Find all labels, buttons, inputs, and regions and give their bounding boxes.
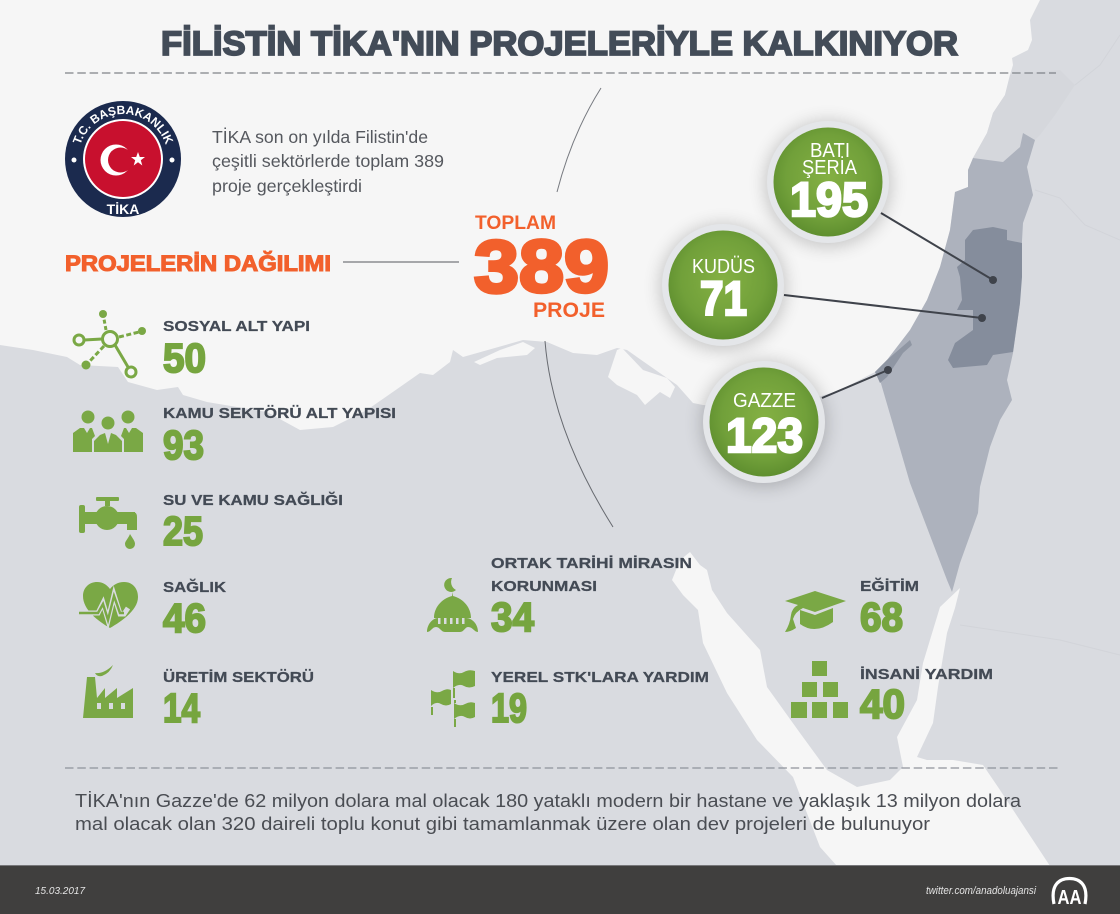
item: kamu sektörü alt yapısı: KAMU SEKTÖRÜ ALT YAPISI — [163, 405, 396, 422]
total: 389 proje: TOPLAM — [475, 213, 556, 234]
map: Lebanon area — [973, 70, 1075, 162]
icon: heart — [78, 582, 138, 628]
arc: upper — [557, 88, 601, 192]
item: sağlık: SAĞLIK — [163, 578, 226, 596]
item: su ve kamu sağlığı: SU VE KAMU SAĞLIĞI — [163, 491, 343, 509]
icon: network — [74, 310, 146, 377]
map: Israel region — [875, 133, 1035, 592]
item: sosyal alt yapı: 50 — [163, 335, 206, 381]
logo: TİKA emblem — [65, 101, 181, 217]
logo: TİKA emblem: TİKA — [107, 201, 139, 217]
item: sağlık: 46 — [163, 595, 206, 641]
item: yerel stk'lara yardım — [431, 669, 709, 731]
item: su ve kamu sağlığı — [79, 491, 343, 554]
item: eğitim: 68 — [860, 594, 903, 640]
item: ortak tarihi mirasın korunması: 34 — [491, 594, 534, 640]
item: su ve kamu sağlığı: 25 — [163, 508, 203, 554]
icon: flags — [431, 670, 475, 727]
item: insani yardım: 40 — [860, 681, 905, 727]
footer date: 15.03.2017 — [35, 886, 85, 897]
badge: Kudüs 71: KUDÜS — [692, 256, 755, 278]
footer bar — [0, 865, 1120, 914]
item: sağlık — [78, 578, 226, 641]
badge: Batı Şeria 195: 195 — [790, 174, 868, 227]
map: faint borders — [960, 35, 1120, 655]
intro text: çeşitli sektörlerde toplam 389 — [212, 151, 444, 171]
item: üretim sektörü: ÜRETİM SEKTÖRÜ — [163, 669, 314, 686]
bottom note: mal olacak olan 320 daireli toplu konut gibi tamamlanmak üzere olan dev projeleri de bulunuyor — [75, 814, 930, 834]
icon: people — [73, 410, 143, 452]
logo: Anadolu Ajansı — [1053, 878, 1086, 909]
bottom note — [75, 791, 1022, 834]
item: ortak tarihi mirasın korunması: ORTAK TARİHİ MİRASIN — [491, 555, 692, 572]
badge: Kudüs 71: 71 — [700, 273, 747, 326]
item: sosyal alt yapı: SOSYAL ALT YAPI — [163, 318, 310, 335]
arc: lower — [545, 341, 613, 527]
item: insani yardım: İNSANİ YARDIM — [860, 666, 993, 683]
item: ortak tarihi mirasın korunması: KORUNMASI — [491, 578, 597, 595]
badge: Gazze 123: GAZZE — [733, 390, 796, 412]
bottom note: TİKA'nın Gazze'de 62 milyon dolara mal olacak 180 yataklı modern bir hastane ve yaklaşık 13 milyon dolara — [75, 791, 1022, 811]
logo: Anadolu Ajansı: AA — [1058, 887, 1082, 909]
map: coastal lagoons — [474, 342, 675, 405]
total: 389 proje: 389 — [474, 225, 609, 308]
heading: projelerin dağılımı: PROJELERİN DAĞILIMI — [65, 251, 331, 276]
badge: Batı Şeria 195: BATI — [810, 140, 850, 162]
connector: Batı Şeria — [881, 213, 997, 284]
badge: Gazze 123: 123 — [726, 410, 803, 463]
badge: Kudüs 71 — [661, 224, 785, 349]
total: 389 proje — [474, 213, 609, 322]
map: Gaza — [875, 340, 912, 383]
title: FİLİSTİN TİKA'NIN PROJELERİYLE KALKINIYOR — [161, 25, 958, 63]
connector: Gazze — [822, 366, 892, 398]
item: insani yardım — [791, 661, 993, 727]
intro text: proje gerçekleştirdi — [212, 176, 362, 196]
item: eğitim: EĞİTİM — [860, 577, 919, 595]
item: yerel stk'lara yardım: 19 — [491, 685, 527, 731]
item: kamu sektörü alt yapısı — [73, 405, 396, 468]
icon: boxes — [791, 661, 848, 718]
badge: Batı Şeria 195 — [766, 121, 890, 246]
connector: heading to total — [343, 261, 459, 263]
connector: Kudüs — [784, 295, 986, 322]
badge: Gazze 123 — [702, 361, 826, 486]
icon: graduation cap — [785, 591, 846, 632]
intro text — [212, 127, 444, 196]
total: 389 proje: PROJE — [533, 299, 605, 322]
item: ortak tarihi mirasın korunması — [427, 555, 692, 640]
icon: mosque — [427, 578, 478, 632]
divider: top — [65, 72, 1056, 74]
divider: bottom — [65, 767, 1058, 769]
intro text: TİKA son on yılda Filistin'de — [212, 127, 428, 147]
item: sosyal alt yapı — [74, 310, 310, 381]
item: üretim sektörü — [83, 665, 314, 731]
item: üretim sektörü: 14 — [163, 685, 200, 731]
icon: tap — [79, 497, 137, 549]
item: kamu sektörü alt yapısı: 93 — [163, 422, 204, 468]
footer twitter handle: twitter.com/anadoluajansi — [926, 885, 1036, 897]
map: West Bank — [948, 227, 1022, 368]
badge: Batı Şeria 195: ŞERİA — [802, 156, 858, 179]
item: eğitim — [785, 577, 919, 640]
icon: factory — [83, 665, 133, 718]
logo: TİKA emblem: T.C. BAŞBAKANLIK — [72, 106, 174, 145]
item: yerel stk'lara yardım: YEREL STK'LARA YARDIM — [491, 669, 709, 686]
